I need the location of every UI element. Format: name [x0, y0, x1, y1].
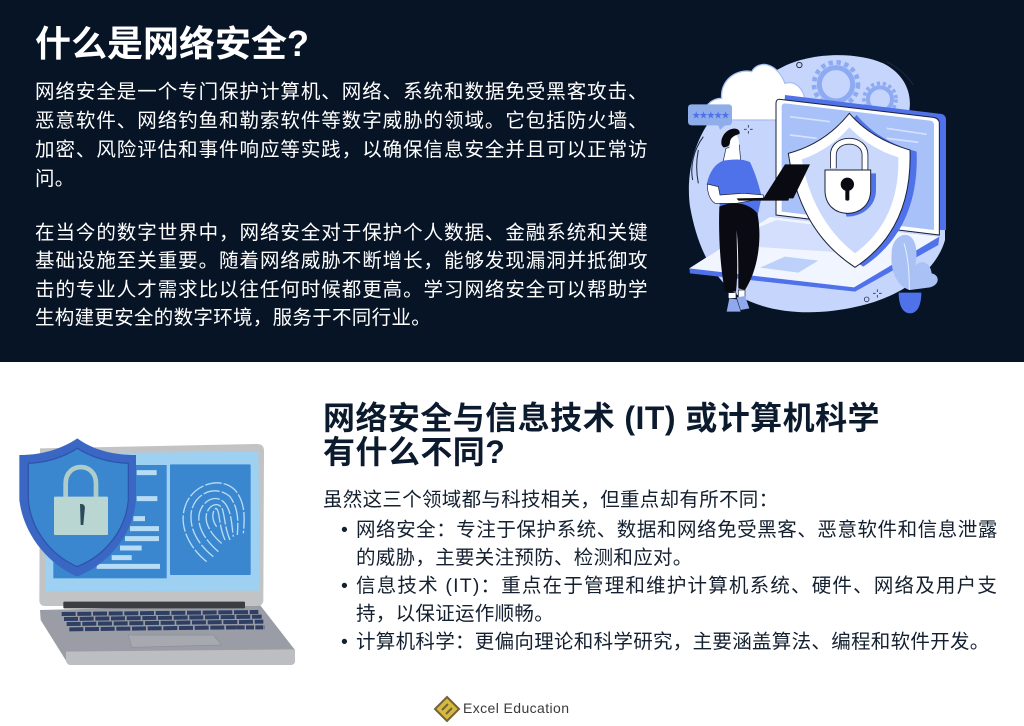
- logo: Excel Education: [434, 696, 569, 722]
- text block: importance paragraph: 生构建更安全的数字环境，服务于不同行业。: [35, 307, 431, 329]
- icon: security shield: [788, 113, 917, 267]
- list item: computer science: [341, 631, 990, 653]
- list: three field comparisons: 网络安全：专注于保护系统、数据和网络免受黑客、恶意软件和信息泄露: [356, 519, 998, 541]
- text block: definition paragraph: 网络安全是一个专门保护计算机、网络、系统和数据免受黑客攻击、: [35, 81, 649, 103]
- text block: definition paragraph: 问。: [35, 168, 75, 190]
- list item: information technology: [341, 575, 998, 625]
- list: three field comparisons: 计算机科学：更偏向理论和科学研究，主要涵盖算法、编程和软件开发。: [356, 631, 990, 653]
- text block: importance paragraph: 在当今的数字世界中，网络安全对于保护个人数据、金融系统和关键: [35, 222, 649, 244]
- list: three field comparisons: 持，以保证运作顺畅。: [356, 603, 554, 625]
- laptop keyboard keys: [62, 612, 265, 629]
- text block: definition paragraph: [35, 81, 649, 190]
- icon: fingerprint: [183, 483, 244, 562]
- list: three field comparisons: [341, 519, 998, 653]
- laptop screen frame: [39, 444, 264, 608]
- icon: gold diamond logo: [434, 696, 460, 722]
- list: three field comparisons: 信息技术 (IT)：重点在于管理和维护计算机系统、硬件、网络及用户支: [356, 575, 998, 597]
- text block: importance paragraph: 击的专业人才需求比以往任何时候都更高。学习网络安全可以帮助学: [35, 279, 649, 301]
- icon: sparkles: [744, 125, 882, 302]
- list: three field comparisons: •: [341, 575, 348, 597]
- icon: rating speech bubble: [688, 104, 732, 130]
- illustration: 3D laptop with shield and fingerprint: [19, 438, 295, 665]
- icon: laptop base: [689, 217, 939, 292]
- title: 什么是网络安全?: [35, 23, 309, 64]
- laptop keyboard deck: [40, 605, 295, 665]
- text block: definition paragraph: 恶意软件、网络钓鱼和勒索软件等数字威胁的领域。它包括防火墙、: [35, 110, 649, 132]
- text lines on screen: [97, 473, 160, 566]
- text block: definition paragraph: 加密、风险评估和事件响应等实践，以确保信息安全并且可以正常访: [35, 139, 649, 161]
- brand name: Excel Education: [463, 700, 569, 716]
- list: three field comparisons: 的威胁，主要关注预防、检测和应对。: [356, 547, 693, 569]
- icon: laptop screen: [776, 95, 946, 235]
- background blob: [689, 55, 945, 312]
- icon: potted plant: [891, 235, 938, 313]
- text block: importance paragraph: [35, 222, 649, 329]
- icon: person: [707, 129, 810, 312]
- heading: comparison question: 网络安全与信息技术 (IT) 或计算机科学: [323, 400, 880, 436]
- icon: blue shield with padlock: [19, 438, 136, 577]
- list: three field comparisons: •: [341, 631, 348, 653]
- list item: cybersecurity: [341, 519, 998, 569]
- icon: cloud: [703, 64, 805, 120]
- text block: comparison intro: 虽然这三个领域都与科技相关，但重点却有所不同：: [323, 489, 778, 511]
- heading: comparison question: [323, 400, 880, 470]
- text block: importance paragraph: 基础设施至关重要。随着网络威胁不断增长，能够发现漏洞并抵御攻: [35, 250, 649, 272]
- icon: rating speech bubble: ★★★★★: [692, 110, 730, 121]
- illustration: person with laptop and security shield: [688, 55, 946, 314]
- icon: gears: [797, 62, 896, 115]
- list: three field comparisons: •: [341, 519, 348, 541]
- icon: motion lines: [692, 62, 913, 183]
- panel: dark introduction section: [0, 0, 1024, 362]
- heading: comparison question: 有什么不同?: [323, 434, 505, 470]
